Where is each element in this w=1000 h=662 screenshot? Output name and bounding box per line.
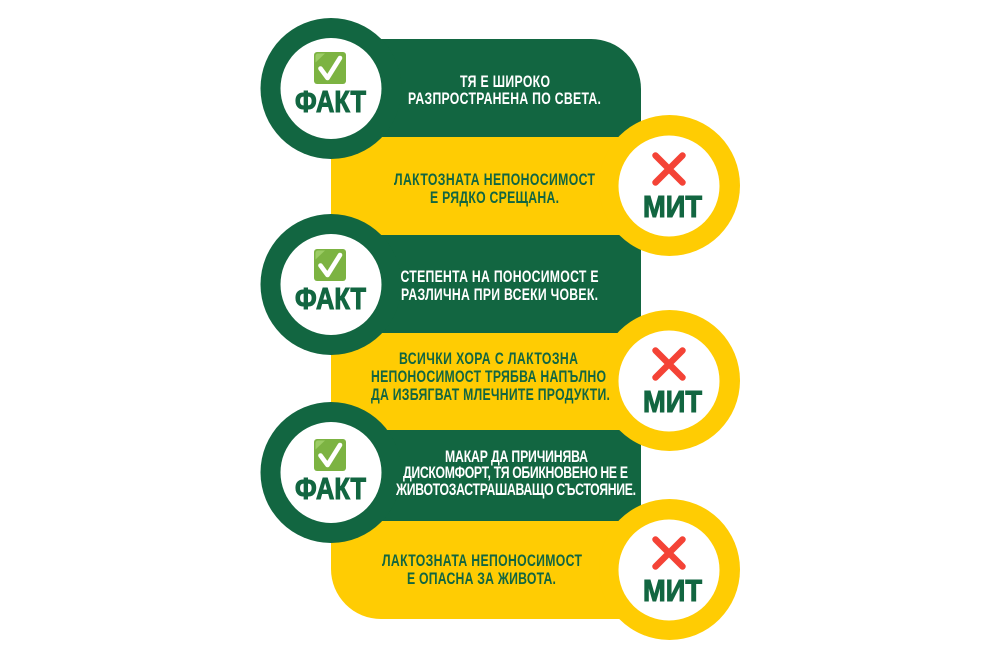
badge: myth 1 bbox=[599, 115, 740, 256]
text: fact 3: ДИСКОМФОРТ, ТЯ ОБИКНОВЕНО НЕ Е bbox=[403, 464, 628, 483]
text: myth 2: НЕПОНОСИМОСТ ТРЯБВА НАПЪЛНО bbox=[371, 368, 606, 387]
text: myth 1: Е РЯДКО СРЕЩАНА. bbox=[430, 189, 559, 208]
panel: fact 2 bar bbox=[331, 235, 641, 333]
text: myth 2 bbox=[371, 350, 610, 405]
text: myth 1: ЛАКТОЗНАТА НЕПОНОСИМОСТ bbox=[394, 171, 595, 190]
text: fact 2: РАЗЛИЧНА ПРИ ВСЕКИ ЧОВЕК. bbox=[401, 286, 598, 305]
panel: myth 1 bar bbox=[331, 137, 670, 235]
badge: myth 2 bbox=[599, 310, 740, 451]
badge: fact 3 bbox=[260, 402, 402, 543]
text: myth 3: Е ОПАСНА ЗА ЖИВОТА. bbox=[407, 570, 556, 589]
icon: green check bbox=[314, 52, 346, 84]
text: myth 3: ЛАКТОЗНАТА НЕПОНОСИМОСТ bbox=[382, 552, 582, 571]
icon: green check bbox=[314, 439, 346, 471]
text: fact 1: РАЗПРОСТРАНЕНА ПО СВЕТА. bbox=[408, 90, 601, 109]
text: fact 3 bbox=[395, 448, 636, 500]
icon: red cross bbox=[656, 156, 682, 182]
text: fact 1: ТЯ Е ШИРОКО bbox=[460, 73, 550, 92]
label: fact: ФАКТ bbox=[295, 471, 366, 506]
panel: myth 3 bar bbox=[331, 521, 670, 619]
panel: myth 2 bar bbox=[331, 333, 670, 430]
panel: fact 1 bar bbox=[331, 39, 641, 137]
text: myth 2: ВСИЧКИ ХОРА С ЛАКТОЗНА bbox=[399, 350, 578, 369]
panel: fact 3 bar bbox=[331, 430, 641, 521]
label: myth: МИТ bbox=[643, 384, 702, 419]
icon: red cross bbox=[656, 350, 682, 378]
badge: fact 1 bbox=[260, 18, 402, 159]
label: myth: МИТ bbox=[643, 189, 702, 224]
label: fact: ФАКТ bbox=[295, 281, 366, 316]
badge: fact 2 bbox=[260, 214, 402, 355]
label: myth: МИТ bbox=[643, 573, 702, 608]
badge: myth 3 bbox=[599, 499, 740, 640]
text: fact 1 bbox=[408, 73, 601, 109]
text: myth 1 bbox=[394, 171, 595, 208]
text: myth 2: ДА ИЗБЯГВАТ МЛЕЧНИТЕ ПРОДУКТИ. bbox=[371, 386, 610, 405]
text: fact 2 bbox=[400, 268, 599, 305]
text: fact 2: СТЕПЕНТА НА ПОНОСИМОСТ Е bbox=[400, 268, 599, 287]
text: myth 3 bbox=[382, 552, 582, 589]
text: fact 3: МАКАР ДА ПРИЧИНЯВА bbox=[445, 448, 588, 467]
icon: green check bbox=[314, 249, 346, 281]
label: fact: ФАКТ bbox=[295, 84, 366, 119]
icon: red cross bbox=[656, 540, 682, 566]
text: fact 3: ЖИВОТОЗАСТРАШАВАЩО СЪСТОЯНИЕ. bbox=[395, 481, 636, 500]
